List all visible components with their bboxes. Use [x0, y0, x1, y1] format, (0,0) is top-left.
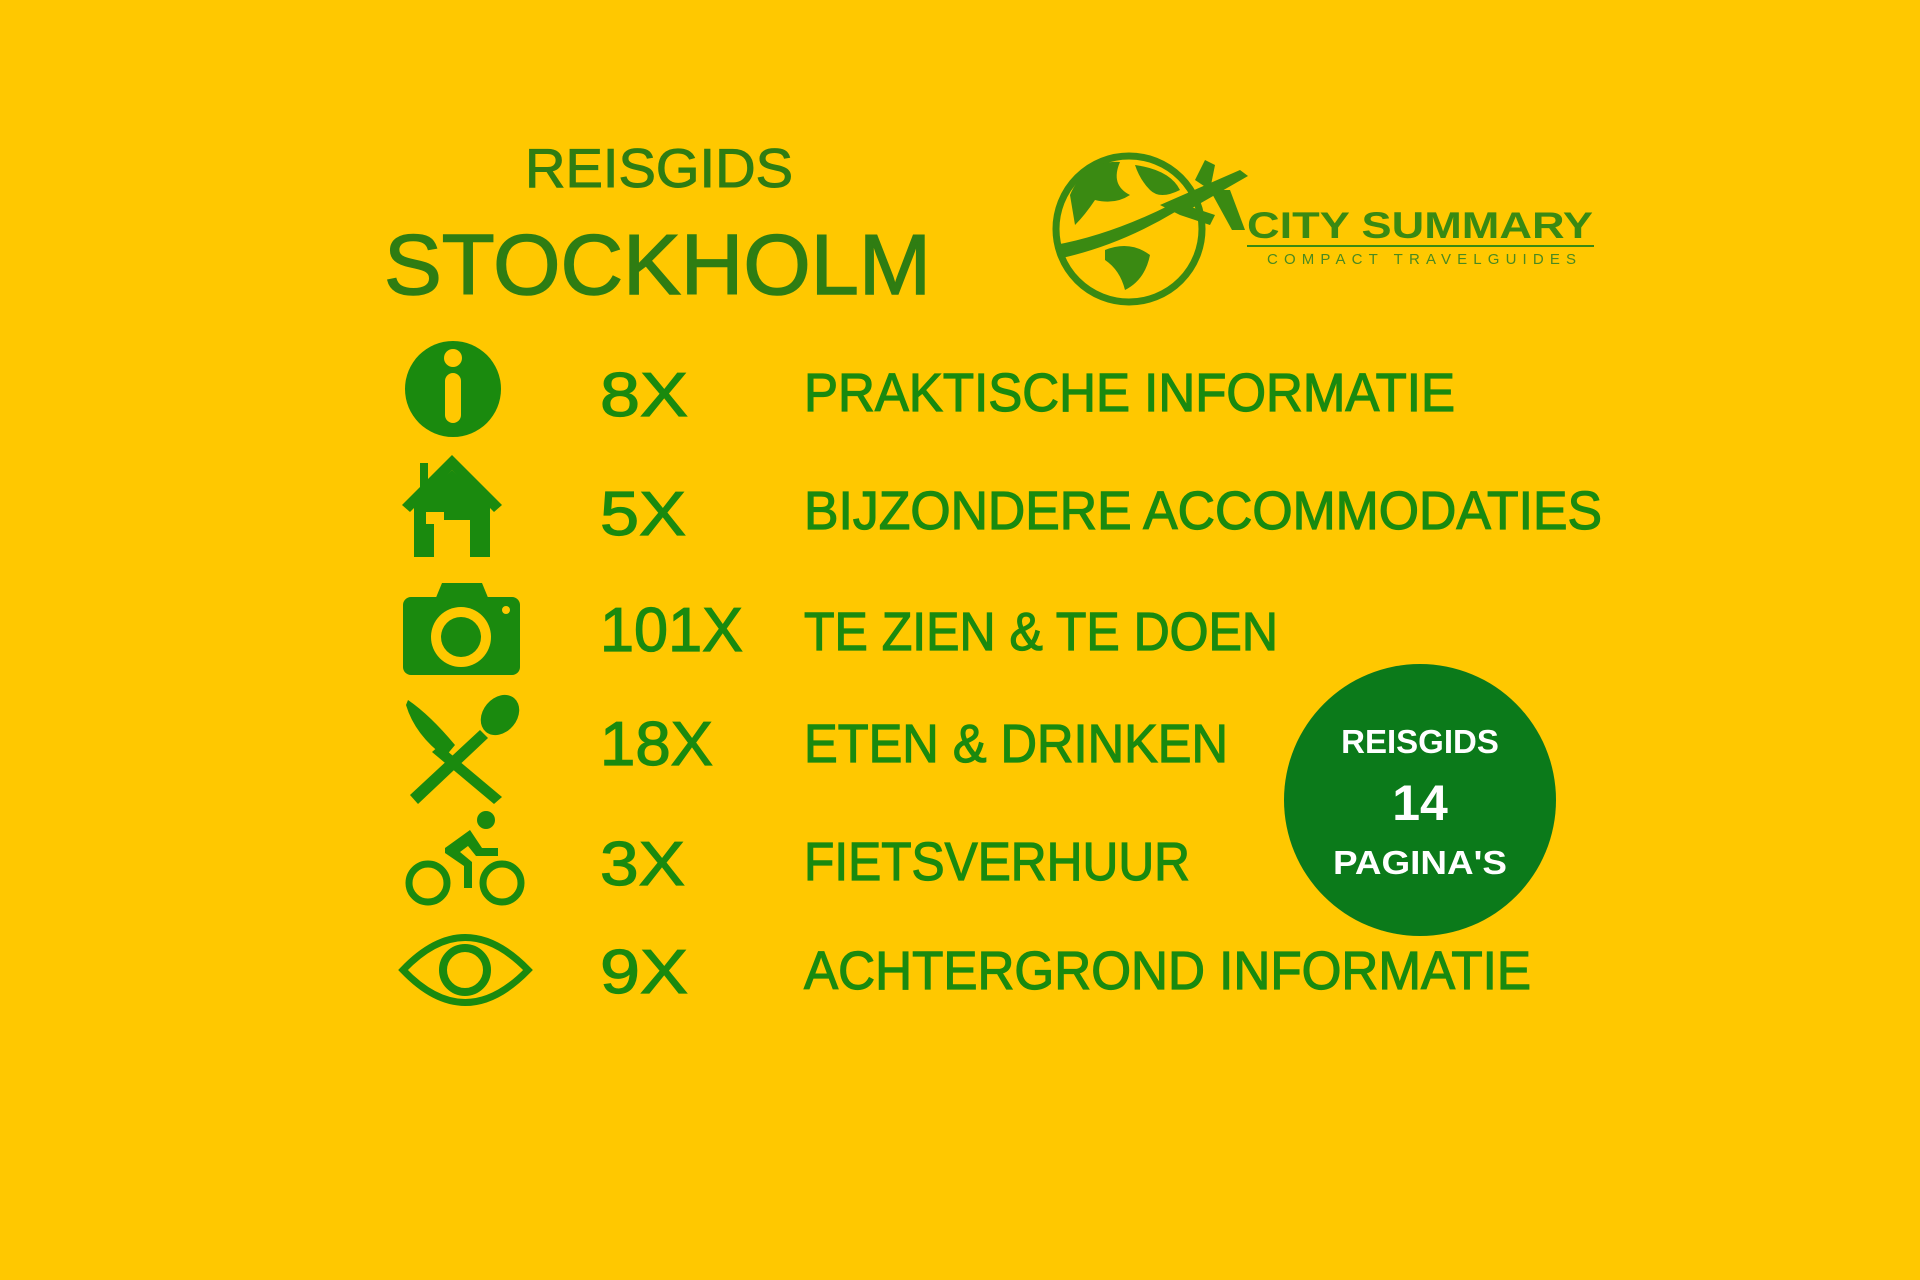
badge: 14 pages	[1284, 664, 1556, 936]
row: achtergrond informatie: ACHTERGROND INFORMATIE	[804, 941, 1531, 1001]
row: praktische informatie	[405, 341, 1455, 437]
row: fietsverhuur: FIETSVERHUUR	[804, 832, 1190, 892]
logo text: tagline: COMPACT TRAVELGUIDES	[1267, 251, 1576, 268]
icon: camera	[403, 583, 520, 675]
row: praktische informatie: 8X	[600, 361, 688, 430]
logo text: city summary: CITY SUMMARY	[1247, 205, 1593, 246]
row: bijzondere accommodaties: BIJZONDERE ACCOMMODATIES	[804, 481, 1602, 541]
badge: 14 pages: PAGINA'S	[1333, 844, 1507, 881]
icon: knife and spoon	[406, 687, 527, 804]
row: te zien & te doen	[403, 583, 1278, 675]
title: reisgids: REISGIDS	[525, 137, 793, 199]
row: achtergrond informatie: 9X	[600, 938, 688, 1007]
row: eten & drinken: 18X	[600, 710, 713, 779]
icon: info	[405, 341, 501, 437]
logo: city summary	[1055, 156, 1594, 302]
icon: bicycle	[409, 811, 521, 902]
title: stockholm: STOCKHOLM	[384, 218, 931, 313]
row: te zien & te doen: 101X	[600, 596, 743, 665]
row: fietsverhuur	[409, 811, 1190, 902]
row: praktische informatie: PRAKTISCHE INFORMATIE	[804, 363, 1455, 423]
icon: globe with plane	[1055, 156, 1248, 302]
row: achtergrond informatie	[403, 938, 1531, 1007]
icon: house	[402, 455, 502, 557]
badge: 14 pages: REISGIDS	[1341, 723, 1499, 760]
row: eten & drinken: ETEN & DRINKEN	[804, 714, 1228, 774]
row: fietsverhuur: 3X	[600, 830, 685, 899]
icon: eye	[403, 938, 528, 1002]
badge: 14 pages: 14	[1392, 775, 1448, 831]
row: te zien & te doen: TE ZIEN & TE DOEN	[804, 602, 1278, 662]
row: bijzondere accommodaties	[402, 455, 1602, 557]
row: bijzondere accommodaties: 5X	[600, 480, 686, 549]
row: eten & drinken	[406, 687, 1228, 804]
